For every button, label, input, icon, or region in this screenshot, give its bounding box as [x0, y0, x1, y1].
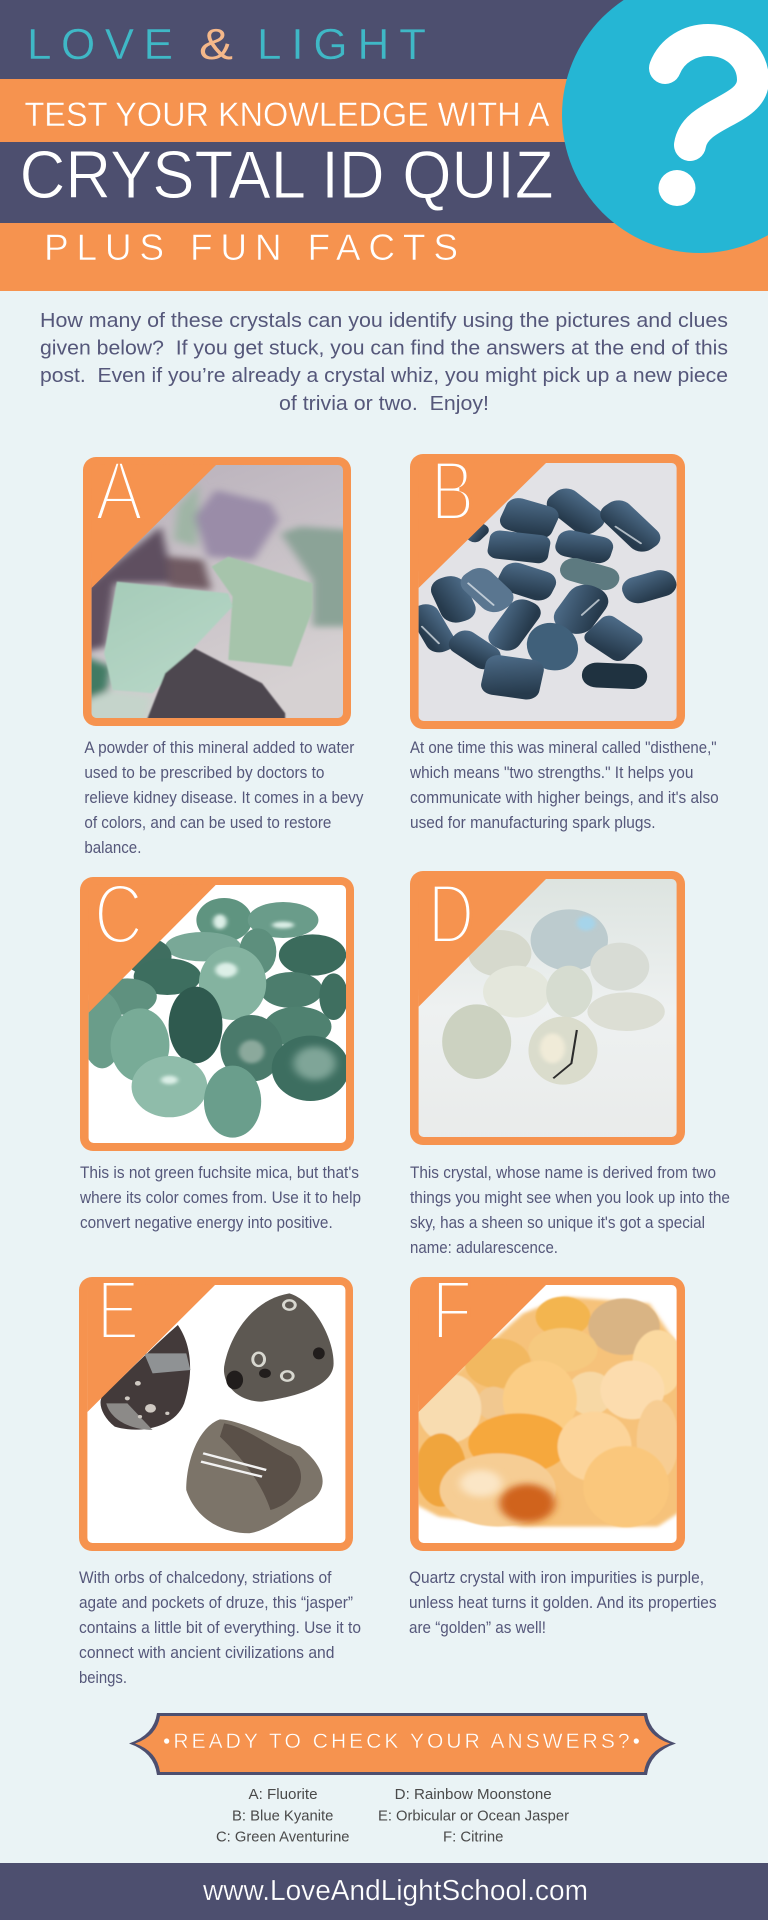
intro text: post. Even if you’re already a crystal whiz, you might pick up a new piece — [40, 364, 728, 387]
text: clue D: sky, has a sheen so unique it's got a special — [410, 1214, 705, 1232]
panel: crystal D — [410, 867, 685, 1145]
text: clue D — [410, 1164, 730, 1257]
text: clue A: of colors, and can be used to restore — [84, 814, 331, 832]
text: clue E: With orbs of chalcedony, striations of — [79, 1569, 332, 1587]
panel: crystal C — [80, 867, 355, 1151]
text: clue A: balance. — [84, 839, 141, 857]
text: clue E: agate and pockets of druze, this “jasper” — [79, 1594, 353, 1612]
text: clue E: contains a little bit of everything. Use it to — [79, 1619, 361, 1637]
logo: love and light — [27, 20, 426, 69]
photo: citrine — [414, 1280, 683, 1547]
intro text: of trivia or two. Enjoy! — [279, 392, 489, 415]
answers list — [216, 1786, 569, 1846]
answers list: C: Green Aventurine — [216, 1829, 350, 1846]
text: clue A — [84, 739, 364, 857]
text: clue C — [79, 1164, 361, 1232]
panel: crystal E — [79, 1263, 353, 1551]
answers list: D: Rainbow Moonstone — [395, 1786, 552, 1803]
answers list: F: Citrine — [443, 1829, 503, 1846]
panel: crystal A — [77, 444, 355, 727]
text: clue F: are “golden” as well! — [409, 1619, 546, 1637]
photo: orbicular jasper — [81, 1280, 350, 1547]
text: clue B: At one time this was mineral called "disthene," — [410, 739, 717, 757]
intro text — [40, 309, 728, 415]
letter E: E — [97, 1263, 139, 1357]
icon: question mark circle — [562, 0, 768, 253]
text: clue B: which means "two strengths." It helps you — [409, 764, 693, 782]
intro text: given below? If you get stuck, you can find the answers at the end of this — [40, 336, 728, 360]
corner tab — [418, 462, 546, 588]
corner tab — [418, 1284, 546, 1412]
corner tab — [87, 1284, 215, 1412]
text: clue C: where its color comes from. Use it to help — [79, 1189, 361, 1207]
text: clue E: connect with ancient civilizations and — [79, 1644, 334, 1662]
letter C: C — [94, 867, 143, 961]
photo: green aventurine — [81, 880, 355, 1147]
letter B: B — [431, 444, 474, 538]
letter D: D — [428, 867, 474, 961]
photo: fluorite — [92, 465, 343, 718]
logo: love and light: LOVE — [27, 20, 173, 69]
title: crystal id quiz: CRYSTAL ID QUIZ — [20, 137, 554, 213]
panel: crystal B — [406, 444, 685, 729]
header banner — [0, 0, 768, 291]
answers list: A: Fluorite — [248, 1786, 318, 1803]
text: clue D: name: adularescence. — [410, 1239, 558, 1257]
corner tab — [88, 884, 216, 1013]
text: clue B: communicate with higher beings, and it's also — [410, 789, 719, 807]
letter F: F — [432, 1263, 472, 1357]
text: clue F: unless heat turns it golden. And its properties — [409, 1594, 717, 1612]
text: clue B — [409, 739, 719, 832]
photo: blue kyanite — [418, 463, 677, 721]
corner tab — [91, 464, 216, 588]
text: clue F — [409, 1569, 717, 1637]
text: clue A: relieve kidney disease. It comes in a bevy — [84, 789, 364, 807]
banner: ready to check your answers: •READY TO CHECK YOUR ANSWERS?• — [163, 1730, 640, 1753]
text: clue C: convert negative energy into positive. — [80, 1214, 333, 1232]
letter A: A — [95, 444, 143, 538]
text: clue E: beings. — [79, 1669, 127, 1687]
banner: ready to check your answers — [129, 1713, 676, 1775]
answers list: E: Orbicular or Ocean Jasper — [378, 1808, 569, 1825]
text: clue D: This crystal, whose name is derived from two — [410, 1164, 716, 1182]
text: clue A: used to be prescribed by doctors to — [84, 764, 324, 782]
panel: crystal F — [410, 1263, 685, 1551]
text: clue C: This is not green fuchsite mica, but that's — [80, 1164, 359, 1182]
text: clue A: A powder of this mineral added to water — [84, 739, 355, 757]
text: clue E — [79, 1569, 361, 1687]
answers list: B: Blue Kyanite — [232, 1808, 333, 1825]
corner tab — [418, 878, 546, 1007]
logo: love and light: & — [199, 20, 233, 69]
text: clue B: used for manufacturing spark plugs. — [410, 814, 656, 832]
text: clue D: things you might see when you look up into the — [410, 1189, 730, 1207]
photo: rainbow moonstone — [414, 873, 683, 1143]
text: clue F: Quartz crystal with iron impurities is purple, — [409, 1569, 704, 1587]
subtitle: plus fun facts: PLUS FUN FACTS — [44, 227, 458, 268]
footer: www.LoveAndLightSchool.com — [202, 1875, 588, 1907]
logo: love and light: LIGHT — [257, 20, 426, 69]
intro text: How many of these crystals can you identify using the pictures and clues — [40, 309, 728, 332]
footer — [0, 1863, 768, 1920]
title line: test your knowledge: TEST YOUR KNOWLEDGE WITH A — [24, 96, 550, 134]
